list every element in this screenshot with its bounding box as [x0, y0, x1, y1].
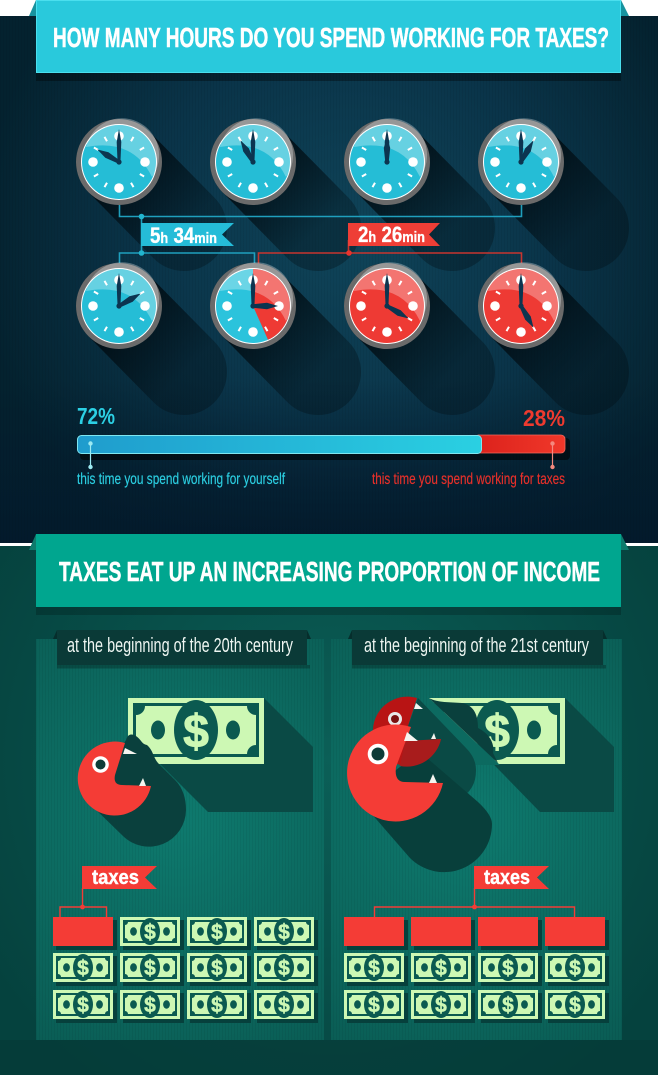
monster: large 21st — [347, 724, 443, 821]
clock: 3 o'clock split blue and red — [210, 262, 296, 349]
shadow: bill 21st — [429, 698, 614, 812]
icon: big bill 20th: $ — [183, 705, 209, 757]
tag: 5h 34min: 5h 34min — [150, 223, 217, 248]
clock: 4 o'clock — [344, 262, 430, 349]
label: 28%: 28% — [523, 405, 565, 431]
monster: small dark 21st — [373, 697, 441, 767]
bill: $ — [435, 957, 447, 980]
tax block — [344, 917, 408, 950]
bill: $ — [502, 957, 514, 980]
tab: 20th century: at the beginning of the 20th century — [67, 635, 293, 657]
bill: $ — [569, 957, 581, 980]
bill: $ — [144, 994, 156, 1017]
section: hours background — [0, 0, 658, 546]
section: income background — [0, 543, 658, 1075]
bill — [478, 953, 542, 986]
icon: big bill 21st: $ — [484, 705, 510, 757]
bill: $ — [569, 994, 581, 1017]
shadow: small monster 20th — [88, 735, 186, 847]
caption: working for taxes: this time you spend working for taxes — [372, 471, 565, 488]
connector dots — [139, 214, 352, 256]
clock: 2 o'clock — [76, 262, 162, 349]
patch: eaten corner of bill 21st — [429, 698, 500, 765]
bill — [187, 953, 251, 986]
bill — [187, 917, 251, 950]
tax block — [545, 917, 609, 950]
bill — [53, 990, 117, 1023]
connector lines: blue — [120, 205, 522, 265]
bill — [545, 953, 609, 986]
bill: $ — [211, 994, 223, 1017]
bill: $ — [211, 921, 223, 944]
bill: $ — [77, 994, 89, 1017]
shadow: bite on bill 21st — [429, 698, 498, 763]
shadow: small monster 21st — [405, 698, 476, 798]
flag: taxes 20th: taxes — [92, 867, 139, 889]
bill — [344, 953, 408, 986]
bill — [254, 953, 318, 986]
bill: $ — [278, 957, 290, 980]
clock: 1 o'clock — [478, 118, 564, 205]
flag: taxes 21st: taxes — [484, 867, 530, 889]
icon: big bill 20th — [128, 698, 264, 764]
grid: bills 20th century — [53, 917, 318, 1023]
flag: taxes 20th — [60, 866, 157, 917]
bill — [254, 990, 318, 1023]
caption: working for yourself: this time you spend working for yourself — [77, 471, 285, 488]
grid: bills 21st century — [344, 917, 609, 1023]
bill: $ — [77, 957, 89, 980]
tax block — [53, 917, 117, 950]
title banner: hours — [29, 0, 629, 81]
bill — [411, 990, 475, 1023]
label: 72%: 72% — [77, 403, 115, 429]
bill — [411, 953, 475, 986]
bill: $ — [278, 994, 290, 1017]
bill: $ — [502, 994, 514, 1017]
bill — [120, 990, 184, 1023]
bill — [254, 917, 318, 950]
progress bar 72 / 28 — [78, 435, 570, 469]
clock: 10 o'clock — [76, 118, 162, 205]
tag: 2h 26min: 2h 26min — [358, 222, 425, 247]
tab: 20th century — [53, 630, 311, 668]
monster: 20th century — [78, 742, 151, 816]
bill: $ — [368, 994, 380, 1017]
connector lines: red — [258, 240, 522, 265]
bill — [53, 953, 117, 986]
bill: $ — [368, 957, 380, 980]
bill: $ — [144, 921, 156, 944]
icon: big bill 21st — [429, 698, 565, 764]
panel: 21st century — [331, 639, 622, 1040]
bill: $ — [211, 957, 223, 980]
shadow: bill 20th — [128, 698, 313, 812]
bill — [344, 990, 408, 1023]
tax block — [478, 917, 542, 950]
bill: $ — [278, 921, 290, 944]
bill — [545, 990, 609, 1023]
bill — [120, 917, 184, 950]
title banner: income — [29, 534, 629, 615]
bill: $ — [435, 994, 447, 1017]
tab: 21st century — [348, 630, 607, 668]
bill — [478, 990, 542, 1023]
flag: taxes 21st — [374, 866, 574, 917]
tax block — [411, 917, 475, 950]
clock: 12 o'clock — [344, 118, 430, 205]
panel: 20th century — [36, 639, 324, 1040]
clock: 5 o'clock — [478, 262, 564, 349]
long shadows of clocks — [119, 162, 586, 372]
bill — [187, 990, 251, 1023]
clock: 11 o'clock — [210, 118, 296, 205]
shadow: large monster 21st — [370, 752, 492, 872]
bill — [120, 953, 184, 986]
bill: $ — [144, 957, 156, 980]
